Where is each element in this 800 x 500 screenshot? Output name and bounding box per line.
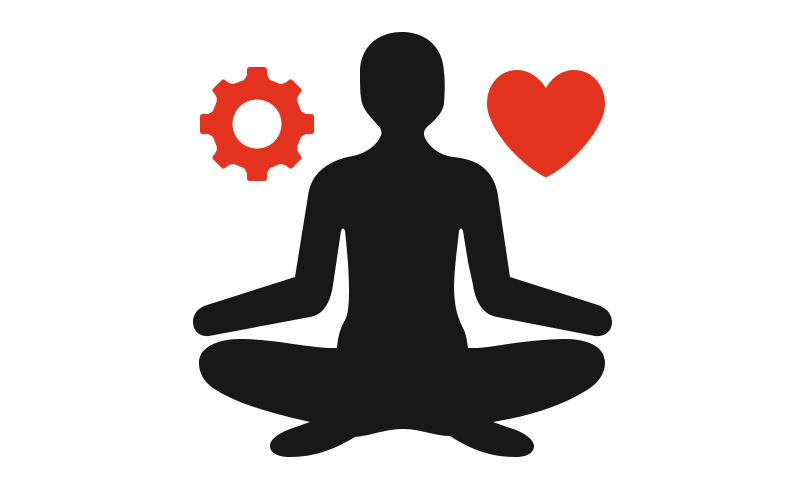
icon: heart — [487, 70, 605, 178]
icon: gear — [200, 67, 314, 181]
figure: meditating person silhouette — [193, 32, 612, 457]
